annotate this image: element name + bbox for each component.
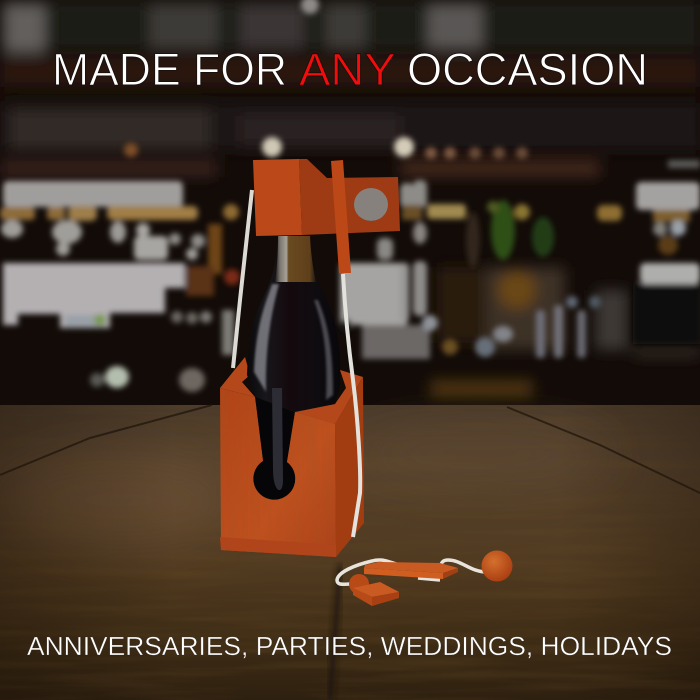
rope loop [337,560,487,584]
bar background [0,0,700,410]
title: OCCASION [407,44,648,95]
disassembled puzzle pieces [337,550,512,606]
left rope [233,190,252,368]
small block with ball [349,574,399,606]
back rim of box [220,357,363,424]
wooden box front face [220,385,338,560]
box side face [335,377,364,557]
porthole view through block [353,187,389,221]
title: MADE FOR [52,44,287,95]
wine bottle puzzle [220,159,400,560]
box base strip [220,537,336,557]
wine bottle [247,236,340,500]
title: ANY [299,44,396,95]
right rope [343,274,360,537]
wooden table top [0,405,700,700]
top block front face [253,159,302,236]
round ball [482,550,512,582]
flat stick piece [364,562,458,579]
vertical stick [331,160,351,273]
top block side with hole [299,159,400,235]
occasions subtitle: ANNIVERSARIES, PARTIES, WEDDINGS, HOLIDAYS [27,631,672,661]
